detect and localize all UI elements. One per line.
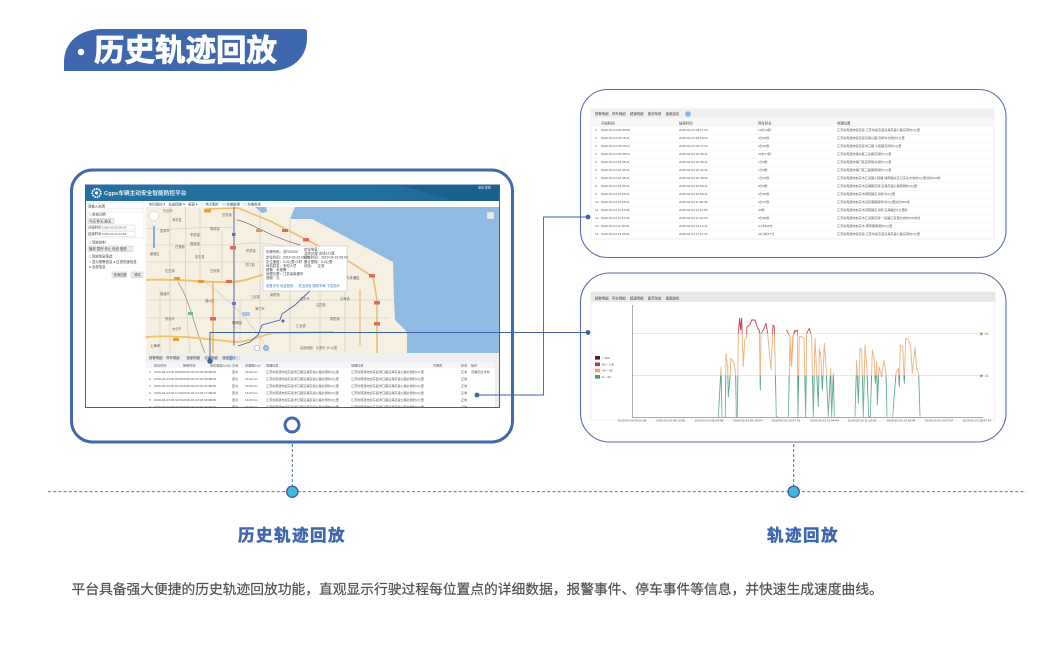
map popup: 接收时间：2019-03-23 08:00 bbox=[304, 254, 348, 260]
map popup: 查看详情 轨迹回放 → 发送消息 跟踪车辆 下发指令 bbox=[266, 283, 341, 288]
table rows: 江苏省南通市如东县 江苏省如东县沿海高速公路东侧约2公里 bbox=[837, 231, 920, 236]
minor roads bbox=[146, 207, 394, 353]
bottom event table: 方向 bbox=[232, 362, 238, 368]
bottom event table: 西北 bbox=[232, 397, 239, 402]
heading: 轨迹回放: 轨迹回放 bbox=[767, 525, 839, 545]
tab bar bbox=[591, 109, 994, 118]
table rows: 2019-03-23 09:15:11 bbox=[601, 136, 630, 140]
map labels: 角斜镇 bbox=[210, 226, 220, 231]
table rows: 江苏省南通市启东市 惠萍镇南侧约2公里 bbox=[837, 223, 892, 228]
table rows: 2019-03-23 10:58:11 bbox=[601, 200, 630, 204]
bottom event table: 2019-03-23 00:01:00 bbox=[183, 384, 212, 388]
axes bbox=[618, 305, 992, 422]
table rows: 26小时47分 bbox=[758, 231, 774, 236]
map labels: 三余镇 bbox=[250, 294, 260, 299]
bottom event table: 16.83 km bbox=[245, 398, 258, 402]
table rows: 2019-03-23 14:14:11 bbox=[679, 224, 708, 228]
bottom event table: 江苏省南通市如东县洋口镇沿海高速公路北侧约2公里 bbox=[266, 397, 339, 402]
bottom event table: 2 bbox=[149, 377, 151, 381]
table rows: 2019-03-23 11:13:35 bbox=[601, 208, 630, 212]
table rows: 2019-03-23 10:40:41 bbox=[601, 168, 630, 172]
table rows: 13 bbox=[595, 224, 599, 228]
map bbox=[146, 207, 500, 355]
table rows: 江苏省南通市启东市寅阳镇东北侧 沿海路约1公里处 bbox=[837, 207, 908, 212]
table header: 停车时长 bbox=[758, 120, 772, 126]
map labels: 高德地图 比例尺 10 公里 bbox=[300, 345, 338, 350]
table rows: 江苏省南通市如东县洋口镇 人民路东侧约1公里 bbox=[837, 143, 901, 148]
map popup: 定位时间：2019-03-23 08:00 bbox=[266, 254, 310, 260]
sidebar: 开始时间 bbox=[88, 224, 102, 230]
table rows: 9 bbox=[595, 192, 597, 196]
map labels: 姜堰区 bbox=[150, 251, 160, 256]
zoom control bbox=[150, 212, 494, 252]
table rows: 2 bbox=[595, 136, 597, 140]
table rows: 39分17秒 bbox=[758, 151, 771, 156]
table rows: 江苏省南通市启东市吕四港镇南侧 约2公里处约300米 bbox=[837, 199, 910, 204]
table rows: 2019-03-24 17:17:37 bbox=[679, 232, 708, 236]
map popup bbox=[263, 246, 348, 291]
legend: > 100 bbox=[602, 356, 610, 360]
bottom event table: 江苏省南通市如东县洋口镇沿海高速公路北侧约2公里 bbox=[351, 397, 424, 402]
bottom event table: 正常 bbox=[461, 390, 467, 395]
axes: 2019-03-23 08:24:08 bbox=[695, 418, 724, 422]
table rows: 8分0秒 bbox=[758, 183, 768, 188]
bottom event table: 16.82 km bbox=[245, 370, 258, 374]
legend bbox=[595, 356, 614, 379]
tab bar: 报警明细 停车明细 超速明细 疲劳驾驶 速度曲线 bbox=[595, 296, 680, 300]
table rows: 4 bbox=[595, 152, 597, 156]
bottom event table: 状态 bbox=[461, 362, 467, 368]
tab bar: 报警明细 停车明细 超速明细 疲劳驾驶 速度曲线 bbox=[595, 111, 680, 116]
table rows: 2019-03-23 14:30:11 bbox=[601, 232, 630, 236]
table rows: 1 bbox=[595, 128, 597, 132]
table rows: 5 bbox=[595, 160, 597, 164]
sidebar bbox=[86, 202, 144, 278]
description text: 平台具备强大便捷的历史轨迹回放功能，直观显示行驶过程每位置点的详细数据，报警事件、停车事件等信息，并快速生成速度曲线。 bbox=[72, 581, 883, 597]
table rows: 10 bbox=[595, 200, 599, 204]
tab bar bbox=[591, 292, 995, 302]
bottom event table: 接收时间 bbox=[183, 362, 195, 368]
map labels: 常熟市 bbox=[165, 316, 175, 321]
connector: event table to stop table bbox=[475, 215, 590, 397]
bottom event table bbox=[146, 353, 500, 409]
axes: 2019-03-23 14:18:44 bbox=[887, 418, 916, 422]
map labels: 吕四港 bbox=[316, 302, 326, 307]
table rows: 江苏省南通市启东市汇龙镇东侧 一段路口东南方向约500米处 bbox=[837, 215, 920, 220]
bottom event table: 正常 bbox=[461, 404, 467, 409]
table rows: 2019-03-23 10:36:11 bbox=[679, 160, 708, 164]
sidebar: ○ 显示报警信息 ● 过滤低速信息 bbox=[89, 259, 137, 264]
table rows: 12 bbox=[595, 216, 599, 220]
axes: 2019-03-24 14:07:07 bbox=[925, 418, 954, 422]
map labels: 如皋市 bbox=[160, 228, 170, 233]
bottom event table: 西北 bbox=[232, 390, 239, 395]
bottom event table: 江苏省南通市如东县洋口镇沿海高速公路北侧约2公里 bbox=[266, 404, 339, 409]
map labels: 石庄镇 bbox=[165, 268, 175, 273]
sidebar: □ 查询日期 bbox=[89, 212, 106, 216]
map labels: 海安县 bbox=[172, 217, 182, 222]
map labels: 岔河镇 bbox=[210, 268, 220, 273]
map popup: 车牌号码：苏F00000 bbox=[266, 249, 298, 254]
table rows: 江苏省南通市通州区三余镇东侧约1公里 bbox=[837, 151, 891, 156]
bottom event table: 6 bbox=[149, 405, 151, 409]
speed curve bbox=[718, 318, 920, 417]
map labels: 掘港镇 bbox=[190, 241, 200, 246]
table rows: 2019-03-23 10:58:11 bbox=[679, 192, 708, 196]
bottom event table: 报警明细 停车明细 速度明细 详细明细 速度曲线 bbox=[149, 355, 236, 360]
table rows: 江苏省南通市海门区四甲镇北侧约1公里 bbox=[837, 159, 891, 164]
bottom event table: 查看定位详情 bbox=[471, 369, 490, 374]
bottom event table: 西北 bbox=[232, 383, 239, 388]
axes: 2019-03-23 11:04:44 bbox=[810, 418, 839, 422]
table rows: 2019-03-23 10:58:11 bbox=[679, 184, 708, 188]
bottom event table: 1 bbox=[149, 370, 151, 374]
bottom event table: 2019-03-23 00:32:00 bbox=[154, 398, 183, 402]
map labels: 李堡镇 bbox=[190, 232, 200, 237]
bottom event table: 江苏省南通市如东县洋口镇沿海高速公路北侧约2公里 bbox=[266, 390, 339, 395]
map labels: 汇龙镇 bbox=[296, 323, 306, 328]
bottom event table: 江苏省南通市如东县洋口镇沿海高速公路北侧约2公里 bbox=[266, 376, 339, 381]
bottom event table: 西北 bbox=[232, 369, 239, 374]
axes: 2019-03-23 09:30:04 bbox=[733, 418, 762, 422]
map labels: 如东县 bbox=[195, 254, 205, 259]
table rows: 2019-03-23 11:24:15 bbox=[679, 216, 708, 220]
legend: 80 ~ 100 bbox=[602, 362, 614, 366]
bottom event table: 2019-03-23 00:32:00 bbox=[183, 398, 212, 402]
bottom event table: 正常 bbox=[461, 376, 467, 381]
connector: map to chart bbox=[207, 330, 590, 364]
bottom event table: 16.82 km bbox=[245, 384, 258, 388]
bottom event table: 江苏省南通市如东县洋口镇沿海高速公路北侧约2公里 bbox=[351, 369, 424, 374]
axes: 2019-03-23 18:47:07 bbox=[963, 418, 992, 422]
table rows: 2019-03-23 09:27:34 bbox=[679, 144, 708, 148]
map popup: 视频：无 bbox=[266, 275, 280, 280]
bottom event table: 正常 bbox=[461, 397, 467, 402]
table rows: 1分21秒 bbox=[758, 175, 769, 180]
bottom event table: 江苏省南通市如东县洋口镇沿海高速公路北侧约2公里 bbox=[351, 390, 424, 395]
table rows: 2019-03-23 10:25:11 bbox=[679, 152, 708, 156]
threshold lines bbox=[632, 331, 989, 378]
table rows: 江苏省南通市启东市近海镇东侧 沿海高速公路南侧约3公里 bbox=[837, 183, 917, 188]
table rows: 2019-03-23 11:30:31 bbox=[601, 224, 630, 228]
bottom event table: 2019-03-23 00:00:00 bbox=[154, 370, 183, 374]
bottom event table: 地理位置 bbox=[351, 362, 363, 368]
threshold lines: ▶ 80 bbox=[980, 331, 989, 336]
bottom event table: 5 bbox=[149, 398, 151, 402]
map popup: 定位速度：0.0公里/小时 bbox=[266, 259, 303, 264]
bottom event table: 16.83 km bbox=[245, 405, 258, 409]
bottom event table: 西北 bbox=[232, 404, 239, 409]
app header: Cgps车辆主动安全智能防控平台 bbox=[104, 189, 187, 197]
panel: tablet with map screenshot bbox=[72, 170, 512, 442]
bottom event table: 西北 bbox=[232, 376, 239, 381]
bottom event table: 正常 bbox=[461, 369, 467, 374]
sidebar: □ 回放信息筛选 bbox=[89, 254, 113, 258]
bottom event table: 0.00 bbox=[210, 398, 216, 402]
map labels: 洋口镇 bbox=[245, 262, 255, 267]
table rows: 2019-03-23 09:11:13 bbox=[679, 128, 708, 132]
table rows: 1分0秒 bbox=[758, 167, 768, 172]
table rows: 2019-03-23 09:45:54 bbox=[601, 152, 630, 156]
bottom event table: 2019-03-23 00:47:00 bbox=[183, 405, 212, 409]
panel: stop record table bbox=[580, 90, 1006, 258]
dashed timeline bbox=[48, 444, 1026, 497]
table rows: 20秒 bbox=[758, 207, 765, 212]
legend: 40 ~ 80 bbox=[602, 369, 613, 373]
bottom event table: 0.00 bbox=[210, 391, 216, 395]
home button bbox=[285, 418, 299, 432]
map popup: 定位信息： bbox=[304, 246, 321, 252]
bottom event table: 2019-03-23 00:47:00 bbox=[154, 405, 183, 409]
toolbar: 实时监控 ▾ 轨迹回放 ▾ 报表 ▾ ◇ 电子围栏 ☐ 车辆管理 ☐ 车辆查询 bbox=[149, 201, 261, 206]
map labels: 通州区 bbox=[205, 298, 215, 303]
map labels: 崇明岛 bbox=[232, 320, 243, 325]
map popup: 累计里程：0.0公里 bbox=[304, 259, 333, 264]
sidebar: 2019-03-23 23:59 bbox=[102, 232, 127, 236]
table rows: 6 bbox=[595, 168, 597, 172]
table rows: 14 bbox=[595, 232, 599, 236]
map labels: 富安镇 bbox=[222, 212, 232, 217]
bottom event table: 江苏省南通市如东县洋口镇沿海高速公路北侧约2公里 bbox=[351, 404, 424, 409]
sidebar: 播放 暂停 停止 快进 慢退 bbox=[89, 246, 127, 251]
map labels bbox=[150, 208, 360, 350]
table rows: 10分14秒 bbox=[758, 127, 771, 132]
sidebar: 今天 昨天 前天 bbox=[89, 218, 112, 223]
bottom event table: 定位速度(km/h) bbox=[210, 362, 231, 368]
highway shields bbox=[173, 210, 380, 341]
table rows: 7 bbox=[595, 176, 597, 180]
table rows: 2分10秒 bbox=[758, 143, 769, 148]
sea bbox=[255, 207, 500, 353]
bottom event table: 2019-03-23 00:00:00 bbox=[183, 370, 212, 374]
sidebar: 清除 bbox=[134, 272, 141, 277]
sidebar: 查询回放 bbox=[114, 272, 128, 277]
map popup: 司机姓名：未知人员 bbox=[266, 263, 297, 268]
table rows: 2019-03-23 11:00:38 bbox=[679, 200, 708, 204]
table rows: 11 bbox=[595, 208, 598, 212]
legend: 0 ~ 40 bbox=[602, 375, 611, 379]
bottom event table: 2019-03-23 00:01:00 bbox=[154, 384, 183, 388]
map labels: 南通市 bbox=[160, 291, 170, 296]
table rows: 2019-03-23 09:00:59 bbox=[601, 128, 630, 132]
bottom event table: 0.00 bbox=[210, 405, 216, 409]
table rows: 2019-03-23 11:14:35 bbox=[601, 216, 630, 220]
title badge: 历史轨迹回放 bbox=[94, 34, 277, 68]
map labels: 白蒲镇 bbox=[175, 244, 185, 249]
map labels: 启东市 bbox=[300, 296, 310, 301]
sidebar: □ 回放控制 bbox=[89, 240, 106, 244]
table rows bbox=[595, 127, 941, 236]
screen bbox=[86, 184, 500, 409]
table rows: 2019-03-23 10:46:32 bbox=[679, 176, 708, 180]
table rows: 江苏省南通市海门区三星镇南侧约1公里 bbox=[837, 167, 891, 172]
bottom event table: 2019-03-23 00:17:00 bbox=[183, 391, 212, 395]
map popup: 地理位置：江苏省南通市 bbox=[266, 271, 304, 276]
map labels: 太仓市 bbox=[172, 326, 182, 331]
bottom event table: 地理位置 bbox=[266, 362, 278, 368]
bottom event table: 驾驶员 bbox=[433, 362, 442, 368]
axes: 2019-03-23 11:13:05 bbox=[848, 418, 877, 422]
table rows: 江苏省南通市如东县 江苏省如东县沿海高速公路东侧约2公里 bbox=[837, 127, 920, 132]
map popup: 报警：未报警 bbox=[266, 267, 287, 272]
table rows: 2019-03-23 10:50:11 bbox=[601, 184, 630, 188]
map labels: 寅阳镇 bbox=[330, 316, 340, 321]
table rows: 3 bbox=[595, 144, 597, 148]
table rows: 1分0秒 bbox=[758, 159, 768, 164]
map labels: 南阳镇 bbox=[270, 292, 280, 297]
axes: 2019-03-23 09:12:08 bbox=[656, 418, 685, 422]
bottom event table: 2019-03-23 00:00:30 bbox=[154, 377, 183, 381]
bottom event table: 总里程(km) bbox=[245, 362, 260, 368]
table rows: 8 bbox=[595, 184, 597, 188]
sidebar: 2019-03-23 00:00 bbox=[102, 226, 127, 230]
table rows: 2分27秒 bbox=[758, 199, 769, 204]
app header bbox=[86, 184, 500, 201]
sidebar: ● 全部信息 bbox=[89, 264, 106, 269]
sidebar: 请输入车牌 bbox=[88, 203, 106, 208]
table header: 开始时间 bbox=[601, 120, 615, 126]
bottom event table: 4 bbox=[149, 391, 151, 395]
axes: 2019-03-23 09:02:08 bbox=[618, 418, 647, 422]
bottom event table: 0.00 bbox=[210, 384, 216, 388]
bottom event table: 0.00 bbox=[210, 377, 216, 381]
table rows: 2019-03-23 09:25:24 bbox=[601, 144, 630, 148]
map popup: 北纬32度 东经121度 bbox=[304, 250, 335, 256]
bottom event table: 正常 bbox=[461, 383, 467, 388]
bottom event table: 操作 bbox=[471, 362, 477, 368]
map popup: 状态： 正常 bbox=[304, 263, 325, 268]
table rows: 2019-03-23 10:55:41 bbox=[601, 192, 630, 196]
bottom event table: 0.00 bbox=[210, 370, 216, 374]
table header: 地理位置 bbox=[837, 120, 851, 126]
table rows: 江苏省南通市启东市汇龙镇人民路 城南路交叉口东北方向约1公里处约200米 bbox=[837, 175, 941, 180]
bottom event table: 江苏省南通市如东县洋口镇沿海高速公路北侧约2公里 bbox=[351, 376, 424, 381]
table rows: 江苏省南通市如东县沿海公路 石桥村北侧约1公里 bbox=[837, 135, 905, 140]
map labels: 栟茶镇 bbox=[246, 248, 256, 253]
axes: 2019-03-23 10:47:41 bbox=[772, 418, 801, 422]
bottom event table: 16.82 km bbox=[245, 377, 258, 381]
table rows: 江苏省南通市启东市南阳镇东北侧 约2公里 bbox=[837, 191, 895, 196]
bottom event table: 江苏省南通市如东县洋口镇沿海高速公路北侧约2公里 bbox=[266, 369, 339, 374]
table rows: 2小时43分 bbox=[758, 223, 772, 228]
table rows: 9分40秒 bbox=[758, 215, 769, 220]
heading: 历史轨迹回放: 历史轨迹回放 bbox=[238, 525, 346, 545]
table rows: 2019-03-23 09:19:34 bbox=[679, 136, 708, 140]
map labels: 大丰港区 bbox=[346, 275, 360, 280]
table rows: 2019-03-23 10:35:11 bbox=[601, 160, 630, 164]
highways bbox=[146, 207, 377, 355]
bottom event table: 2019-03-23 00:00:30 bbox=[183, 377, 212, 381]
table rows: 2019-03-23 10:45:11 bbox=[601, 176, 630, 180]
sidebar: 结束时间 bbox=[88, 231, 102, 236]
bottom event table: 江苏省南通市如东县洋口镇沿海高速公路北侧约2公里 bbox=[266, 383, 339, 388]
table header: 结束时间 bbox=[679, 120, 693, 126]
table header bbox=[591, 118, 994, 127]
table rows: 4分23秒 bbox=[758, 135, 769, 140]
threshold lines: ▶ 40 bbox=[980, 373, 989, 378]
track route bbox=[238, 289, 312, 351]
panel: speed curve chart bbox=[580, 273, 1006, 442]
app header: 退出 帮助 bbox=[478, 184, 491, 190]
bottom event table: 3 bbox=[149, 384, 151, 388]
map labels: 近海镇 bbox=[340, 296, 350, 301]
bottom event table: 16.83 km bbox=[245, 391, 258, 395]
table rows: 2019-03-23 11:13:55 bbox=[679, 208, 708, 212]
bottom event table: 2019-03-23 00:17:00 bbox=[154, 391, 183, 395]
bottom event table: 定位时间 bbox=[154, 362, 166, 368]
title badge bbox=[64, 29, 307, 71]
table rows: 2019-03-23 10:41:41 bbox=[679, 168, 708, 172]
map labels: 东台市 bbox=[163, 208, 173, 213]
map labels: 海门市 bbox=[255, 306, 265, 311]
bottom event table: 江苏省南通市如东县洋口镇沿海高速公路北侧约2公里 bbox=[351, 383, 424, 388]
map labels: 上海市 bbox=[150, 343, 161, 348]
table rows: 2分30秒 bbox=[758, 191, 769, 196]
